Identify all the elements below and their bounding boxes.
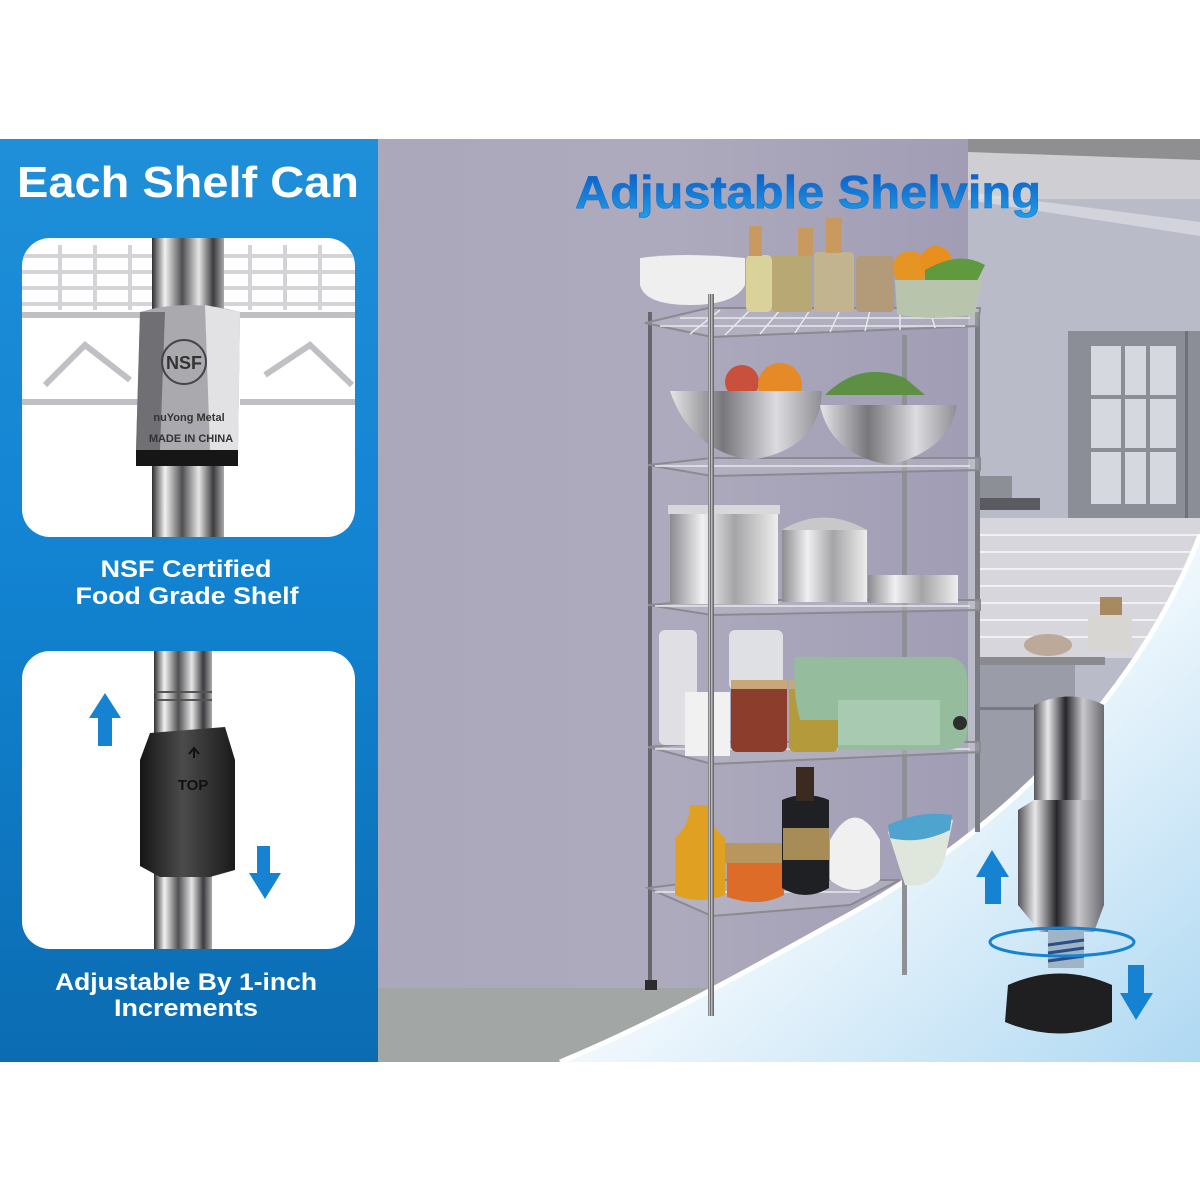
icon: down arrow: [249, 846, 281, 899]
kitchen background: [968, 139, 1200, 845]
third shelf items: [668, 505, 958, 604]
icon: up arrow: [89, 693, 121, 746]
label: nsf certified: NSF Certified: [100, 556, 272, 583]
front post: [708, 294, 714, 1016]
shelving unit: [640, 218, 985, 1016]
room background: [378, 139, 1200, 1062]
photo: adjustable sleeve: [22, 651, 355, 949]
panel: left blue sidebar: Increments: [114, 995, 258, 1022]
photo: NSF certified sleeve: NSF: [166, 353, 202, 373]
photo: NSF certified sleeve: nuYong Metal: [153, 412, 225, 424]
icon: down arrow: [1120, 965, 1153, 1020]
label: adjustable increments: Adjustable By 1-inch: [55, 969, 317, 996]
adjustable foot: [976, 696, 1153, 1034]
shelf decks: [645, 308, 980, 916]
second shelf items: [670, 363, 957, 465]
heading: each shelf can: Each Shelf Can: [17, 158, 359, 207]
top shelf items: [640, 218, 985, 318]
fourth shelf items: [659, 630, 967, 756]
panel: left blue sidebar: Food Grade Shelf: [76, 583, 300, 610]
back posts: [645, 312, 980, 990]
heading: adjustable shelving: Adjustable Shelving: [575, 166, 1041, 218]
icon: up arrow: [976, 850, 1009, 904]
icon: rotation ring: [990, 928, 1134, 956]
fifth shelf items: [675, 767, 953, 902]
corner curve panel: [560, 535, 1200, 1062]
photo: NSF certified sleeve: MADE IN CHINA: [149, 433, 233, 445]
panel: left blue sidebar: [0, 139, 378, 1062]
photo: adjustable sleeve: TOP: [178, 777, 208, 794]
photo: NSF certified sleeve: [22, 238, 355, 537]
